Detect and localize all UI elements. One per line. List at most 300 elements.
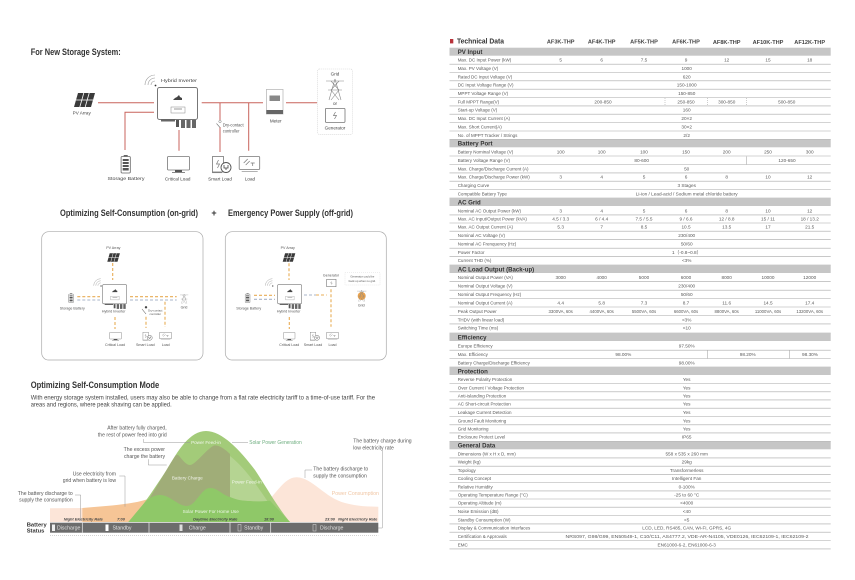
icon: critical load bbox=[110, 332, 121, 340]
section: AC Load Output: 5000 bbox=[639, 275, 650, 280]
section: AC Load Output: THDV (with linear load) bbox=[458, 317, 505, 322]
section: Protection: Yes bbox=[683, 410, 691, 415]
note: charge during low rate: The battery charge during bbox=[353, 438, 412, 444]
section: AC Grid: 12 bbox=[807, 208, 813, 213]
status: discharge: Discharge bbox=[57, 526, 80, 532]
section: Battery Port: 3 bbox=[559, 175, 562, 180]
label: battery status: Status bbox=[27, 529, 44, 535]
section: AC Grid: 13.5 bbox=[722, 225, 732, 230]
section: AC Grid: AC Grid bbox=[458, 199, 481, 206]
section: Battery Port: Max. Charge/Discharge Current (A) bbox=[458, 166, 529, 171]
section: Efficiency: 98.00% bbox=[615, 352, 631, 357]
section: AC Load Output: 8800VA, 60s bbox=[715, 309, 739, 314]
section: General Data: 558 x 535 x 260 mm bbox=[665, 451, 708, 456]
section: AC Grid: Nominal AC Frenquency (Hz) bbox=[458, 242, 517, 247]
chart: daily energy profile bbox=[18, 425, 412, 536]
time labels: 23:00 bbox=[324, 516, 336, 521]
section: AC Grid: Max. AC Input/Output Power (kVA) bbox=[458, 217, 527, 222]
section: AC Load Output: 3300VA, 60s bbox=[549, 309, 573, 314]
section: Battery Port: 3 Stages bbox=[677, 183, 697, 188]
section: Battery Port: 100 bbox=[557, 149, 565, 154]
label: or: or bbox=[333, 101, 338, 106]
section: General Data: General Data bbox=[458, 443, 496, 450]
time labels: 7:00 bbox=[117, 516, 126, 521]
icon: storage battery bbox=[121, 155, 130, 173]
section: AC Grid: 1（-0.8~0.8） bbox=[672, 250, 701, 255]
section: Battery Port: 100 bbox=[640, 149, 648, 154]
section: PV Input: 6 bbox=[600, 58, 603, 63]
section: General Data: Operating Temperature Range (°C) bbox=[458, 493, 528, 498]
section: AC Load Output: Peak Output Power bbox=[458, 309, 497, 314]
label: PV Array: PV Array bbox=[73, 110, 91, 116]
section: Efficiency: Efficiency bbox=[458, 334, 487, 341]
label: PV Array: PV Array bbox=[106, 246, 121, 250]
section: AC Load Output: 230/400 bbox=[678, 284, 696, 289]
flow: PV bbox=[288, 263, 290, 280]
area: grid consumption bbox=[82, 499, 152, 522]
model headers: AF4K-THP bbox=[588, 40, 616, 46]
section: PV Input: 620 bbox=[683, 74, 691, 79]
section: General Data: <40 bbox=[683, 509, 691, 514]
section: Protection: Protection bbox=[458, 368, 488, 375]
label: Load: Load bbox=[245, 177, 256, 182]
section: General Data bbox=[450, 441, 831, 549]
plus sign: + bbox=[211, 208, 217, 218]
section: Protection: Yes bbox=[683, 402, 691, 407]
area: power consumption bbox=[50, 477, 378, 522]
icon: load bbox=[326, 332, 339, 340]
paragraph: With energy storage system installed, users may also be able to change from a flat rate electricity tariff to a time-of-use tariff. For the bbox=[31, 395, 375, 402]
icon: critical load bbox=[284, 332, 295, 340]
section: PV Input: 150-1000 bbox=[677, 83, 697, 88]
heading: off-grid: Emergency Power Supply (off-grid) bbox=[228, 208, 353, 218]
section: General Data: Standby Consumption (W) bbox=[458, 517, 511, 522]
section: AC Load Output: Switching Time (ms) bbox=[458, 326, 499, 331]
section: Efficiency: 98.00% bbox=[679, 360, 695, 365]
section: Battery Port: Max. Charge/Discharge Power (kW) bbox=[458, 175, 530, 180]
section: PV Input: Max. Short Current(A) bbox=[458, 124, 502, 129]
label: Storage Battery: Storage Battery bbox=[108, 176, 145, 181]
section: PV Input: 7.5 bbox=[641, 58, 648, 63]
section: AC Grid: 17 bbox=[765, 225, 771, 230]
section: PV Input bbox=[450, 48, 831, 139]
section: General Data: <4000 bbox=[680, 501, 694, 506]
section: Protection: Anti-islanding Protection bbox=[458, 393, 507, 398]
time labels: Daytime Electricity Rate bbox=[193, 516, 238, 521]
label: Critical Load: Critical Load bbox=[165, 177, 191, 182]
section: Battery Port: 120-650 bbox=[778, 158, 796, 163]
section: AC Load Output: 6000 bbox=[681, 275, 692, 280]
section: AC Grid: 7.5 / 5.5 bbox=[636, 217, 653, 222]
section: AC Load Output: 17.4 bbox=[805, 300, 815, 305]
flow: PV bbox=[112, 263, 114, 280]
section: AC Grid: Nominal AC Output Power (kW) bbox=[458, 208, 521, 213]
icon: PV array bbox=[74, 93, 95, 107]
status: discharge bbox=[52, 524, 80, 532]
section: Battery Port: 6 bbox=[685, 175, 688, 180]
icon: load bbox=[239, 156, 260, 172]
icon: meter bbox=[266, 89, 283, 114]
label: power feed-in top: Power Feed-in bbox=[191, 440, 221, 445]
section: AC Load Output: Nominal Output Current (A) bbox=[458, 300, 513, 305]
section: Protection: Yes bbox=[683, 418, 691, 423]
label: PV Array: PV Array bbox=[281, 246, 295, 250]
section: PV Input: 12 bbox=[724, 58, 730, 63]
icon: generator bbox=[325, 108, 345, 122]
note: grid when battery low: Use electricity from bbox=[73, 471, 116, 477]
section: General Data: Cooling Concept bbox=[458, 476, 492, 481]
section: AC Load Output: <3% bbox=[682, 317, 691, 322]
section: PV Input: Start-up Voltage (V) bbox=[458, 108, 498, 113]
area: solar for home use bbox=[128, 488, 290, 522]
label: solar power generation: Solar Power Generation bbox=[249, 440, 302, 446]
section: Efficiency: Battery Charge/Discharge Efficiency bbox=[458, 360, 531, 365]
icon: battery bbox=[245, 293, 250, 303]
section: AC Load Output: 11000VA, 60s bbox=[755, 309, 781, 314]
status: standby bbox=[106, 524, 132, 532]
note: grid when battery low: grid when battery is low bbox=[63, 478, 116, 484]
section: AC Grid: 7 bbox=[600, 225, 603, 230]
icon: grid bbox=[180, 294, 188, 304]
icon: smart load bbox=[310, 332, 320, 340]
model headers: AF3K-THP bbox=[547, 40, 575, 46]
area: solar power generation bbox=[128, 431, 290, 522]
section: Battery Port: Battery Voltage Range (V) bbox=[458, 158, 510, 163]
icon: wifi bbox=[94, 279, 102, 287]
icon: hybrid inverter bbox=[158, 88, 198, 128]
section: AC Load Output: <10 bbox=[683, 326, 691, 331]
panel: off-grid diagram bbox=[225, 232, 386, 360]
label: Meter: Meter bbox=[270, 118, 282, 123]
label: Grid: Grid bbox=[181, 306, 187, 310]
model headers: AF12K-THP bbox=[794, 40, 825, 46]
section: AC Load Output: 13200VA, 60s bbox=[796, 309, 823, 314]
section: General Data: Display & Communication Interfaces bbox=[458, 526, 531, 531]
section: Protection: Yes bbox=[683, 393, 691, 398]
section: AC Load Output: Nominal Output Frequency (Hz) bbox=[458, 292, 522, 297]
time labels: Night Electricity Rate bbox=[338, 516, 378, 521]
system diagram bbox=[73, 69, 352, 182]
section: AC Load Output: 12000 bbox=[803, 275, 817, 280]
section: Efficiency: 97.50% bbox=[679, 344, 695, 349]
section: AC Grid: Current THD (%) bbox=[458, 258, 492, 263]
section: AC Load Output: Nominal Output Power (VA) bbox=[458, 275, 513, 280]
icon: inverter bbox=[103, 285, 127, 309]
note: excess power: The excess power bbox=[124, 447, 165, 453]
section: Battery Port: 50 bbox=[684, 166, 690, 171]
note: discharge right: The battery discharge to bbox=[313, 467, 368, 473]
section: PV Input: 250-850 bbox=[677, 99, 695, 104]
section: PV Input: MPPT Voltage Range (V) bbox=[458, 91, 509, 96]
icon: pylon bbox=[326, 79, 344, 100]
section: AC Load Output: 4400VA, 60s bbox=[590, 309, 614, 314]
section: PV Input: 200-850 bbox=[594, 99, 612, 104]
note: excess power: charge the battery bbox=[124, 454, 165, 460]
section: AC Load Output: 3000 bbox=[555, 275, 566, 280]
panel: grid or generator bbox=[318, 69, 352, 134]
icon: load bbox=[159, 332, 172, 340]
section: AC Load Output: 11.6 bbox=[722, 300, 731, 305]
section: General Data: Topology bbox=[458, 468, 476, 473]
section: AC Grid: 12 / 8.8 bbox=[719, 217, 735, 222]
status: discharge bbox=[313, 524, 343, 532]
dry-contact switch bbox=[142, 306, 147, 314]
section: AC Load Output: 8.7 bbox=[683, 300, 690, 305]
section: Protection: AC Short-circuit Protection bbox=[458, 402, 511, 407]
section: Battery Port: 12 bbox=[807, 175, 813, 180]
section: AC Load Output: 8000 bbox=[721, 275, 732, 280]
section: AC Grid: Max. AC Output Current (A) bbox=[458, 225, 513, 230]
section: AC Grid: 15 / 11 bbox=[761, 217, 775, 222]
section: General Data: Intelligent Fan bbox=[672, 476, 702, 481]
time labels: Night Electricity Rate bbox=[64, 516, 104, 521]
label: Critical Load: Critical Load bbox=[105, 343, 125, 347]
status: standby: Standby bbox=[244, 526, 264, 532]
label: Grid: Grid bbox=[331, 72, 340, 77]
section: AC Load Output: 6600VA, 60s bbox=[674, 309, 698, 314]
section: AC Load Output: 5500VA, 60s bbox=[632, 309, 656, 314]
icon: solar bbox=[107, 253, 120, 262]
section: AC Load Output: 4.4 bbox=[557, 300, 564, 305]
paragraph: areas and regions, where peak shaving can be applied. bbox=[31, 402, 172, 409]
flow: battery and grid bbox=[77, 297, 177, 300]
section: General Data: 29kg bbox=[682, 460, 692, 465]
section: Battery Port: Battery Port bbox=[458, 141, 493, 148]
section: Battery Port: 150 bbox=[682, 149, 690, 154]
note: discharge right: supply the consumption bbox=[313, 474, 367, 480]
wiring bbox=[98, 103, 317, 152]
section: General Data: NRS097, G98/G99, EN50549-1, C10/C11, AS4777.2, VDE-AR-N4105, VDE0126, IEC62109-1, IEC62109-2 bbox=[566, 534, 809, 539]
section: General Data: 0-100% bbox=[679, 484, 695, 489]
label: battery status: Battery bbox=[27, 522, 47, 528]
section: AC Grid: 8 bbox=[725, 208, 728, 213]
label: battery charge: Battery Charge bbox=[172, 476, 203, 481]
section: Protection: Ground Fault Monitoring bbox=[458, 418, 507, 423]
section: PV Input: No. of MPPT Tracker / Strings bbox=[458, 133, 518, 138]
icon: inverter bbox=[278, 285, 302, 309]
section: PV Input: 18 bbox=[807, 58, 813, 63]
section: PV Input: 20×2 bbox=[681, 116, 692, 121]
section: PV Input: 1000 bbox=[681, 66, 692, 71]
callout: generator note bbox=[345, 273, 380, 285]
section: AC Grid: 5 bbox=[643, 208, 646, 213]
section: Battery Port: 100 bbox=[598, 149, 606, 154]
section: AC Grid: 21.5 bbox=[805, 225, 815, 230]
section: Protection: Over Current / Voltage Protection bbox=[458, 385, 524, 390]
time labels: 18:00 bbox=[264, 516, 275, 521]
section: AC Load Output: 7.3 bbox=[641, 300, 648, 305]
section: PV Input: 300-850 bbox=[718, 99, 736, 104]
icon: battery bbox=[69, 293, 73, 303]
section: General Data: EMC bbox=[458, 542, 468, 547]
dry-contact switch bbox=[216, 120, 221, 128]
heading: on-grid: Optimizing Self-Consumption (on-grid) bbox=[60, 208, 198, 218]
label: Smart Load: Smart Load bbox=[136, 343, 155, 347]
area: battery charge bbox=[149, 445, 230, 508]
section: AC Grid: 8.5 bbox=[641, 225, 648, 230]
label: Critical Load: Critical Load bbox=[279, 343, 299, 347]
section: AC Load Output: 4000 bbox=[596, 275, 607, 280]
model headers: AF6K-THP bbox=[672, 40, 700, 46]
label: Load: Load bbox=[328, 343, 336, 347]
section: General Data: Weight (kg) bbox=[458, 460, 481, 465]
section: Battery Port: Compatible Battery Type bbox=[458, 191, 507, 196]
section: Battery Port: Battery Nominal Voltage (V) bbox=[458, 149, 514, 154]
section: PV Input: Full MPPT Range(V) bbox=[458, 99, 500, 104]
section: PV Input: Max. DC Input Power (kW) bbox=[458, 58, 512, 63]
section: Battery Port: 8 bbox=[725, 175, 728, 180]
section: Battery Port: Charging Curve bbox=[458, 183, 490, 188]
section: Battery Port: 200 bbox=[723, 149, 731, 154]
section: Battery Port bbox=[450, 139, 831, 198]
section: General Data: EN61000-6-2, EN61000-6-3 bbox=[658, 542, 716, 547]
label: Load: Load bbox=[162, 343, 170, 347]
section: AC Grid bbox=[450, 198, 831, 265]
section: General Data: Certification & Approvals bbox=[458, 534, 507, 539]
panel: on-grid diagram bbox=[42, 232, 203, 360]
status: standby bbox=[238, 524, 264, 532]
icon: wifi bbox=[265, 279, 273, 287]
icon: wifi bbox=[145, 75, 156, 86]
flow: generator and load bbox=[289, 289, 331, 329]
section: General Data: Operating Altitude (m) bbox=[458, 501, 502, 506]
label: Storage Battery: Storage Battery bbox=[236, 307, 261, 311]
label: controller: controller bbox=[150, 312, 161, 316]
section: PV Input: 2/2 bbox=[683, 133, 690, 138]
section: AC Grid: 10 bbox=[765, 208, 771, 213]
section: PV Input: 5 bbox=[559, 58, 562, 63]
section: Protection: Enclosure Protect Level bbox=[458, 435, 505, 440]
label: solar for home: Solar Power For Home Use bbox=[183, 509, 239, 514]
heading: Technical Data: Technical Data bbox=[457, 37, 505, 46]
label: Smart Load: Smart Load bbox=[304, 343, 322, 347]
flow: loads bbox=[115, 302, 165, 329]
note: charge during low rate: low electricity rate bbox=[353, 445, 394, 451]
label: Smart Load: Smart Load bbox=[208, 177, 232, 182]
section: AC Grid: 4.5 / 3.3 bbox=[552, 217, 570, 222]
section: AC Grid: 10.5 bbox=[681, 225, 691, 230]
icon: generator bbox=[327, 279, 336, 287]
section: AC Grid: 9 / 6.6 bbox=[679, 217, 693, 222]
section: Protection: Yes bbox=[683, 385, 691, 390]
leader lines bbox=[75, 439, 382, 528]
section: AC Grid: <3% bbox=[682, 258, 691, 263]
flow: battery bbox=[254, 295, 275, 299]
section: Efficiency: Europe Efficiency bbox=[458, 344, 493, 349]
section: Protection: Leakage Current Detection bbox=[458, 410, 512, 415]
section: AC Grid: 4 bbox=[600, 208, 603, 213]
label: power feed-in right: Power Feed-in bbox=[232, 480, 262, 485]
callout: generator note: back up when no grid. bbox=[349, 279, 376, 283]
section: General Data: Dimensions (W x H x D, mm) bbox=[458, 451, 516, 456]
section: AC Grid: 6 / 4.4 bbox=[595, 217, 609, 222]
section: General Data: Noise Emission (dB) bbox=[458, 509, 499, 514]
section: Battery Port: 5 bbox=[643, 175, 646, 180]
label: power consumption: Power Consumption bbox=[332, 491, 379, 497]
section: Protection: Grid Monitoring bbox=[458, 426, 489, 431]
section: PV Input: PV Input bbox=[458, 49, 482, 56]
section: Battery Port: 10 bbox=[765, 175, 771, 180]
section: PV Input: DC Input Voltage Range (V) bbox=[458, 83, 514, 88]
label: Storage Battery: Storage Battery bbox=[60, 307, 85, 311]
panel: technical data table bbox=[450, 37, 831, 549]
section: Protection: Yes bbox=[683, 426, 691, 431]
section: PV Input: Max. PV Voltage (V) bbox=[458, 66, 499, 71]
label: Hybrid Inverter: Hybrid Inverter bbox=[161, 78, 198, 83]
note: discharge left: The battery discharge to bbox=[18, 491, 73, 497]
icon: solar bbox=[283, 253, 295, 262]
section: General Data: LCD, LED, RS485, CAN, Wi-Fi, GPRS, 4G bbox=[642, 526, 731, 531]
section: AC Grid: Nominal AC Voltage (V) bbox=[458, 233, 505, 238]
section: AC Load Output: 50/60 bbox=[681, 292, 693, 297]
status: standby: Standby bbox=[112, 526, 132, 532]
section: Protection: IP65 bbox=[682, 435, 692, 440]
section: AC Grid: 6 bbox=[685, 208, 688, 213]
section: Battery Port: 250 bbox=[764, 149, 772, 154]
label: dry-contact controller: controller bbox=[223, 128, 240, 134]
section: PV Input: 9 bbox=[685, 58, 688, 63]
section: General Data: Transformerless bbox=[670, 468, 704, 473]
section: Battery Port: Li-ion / Lead-acid / Sodium metal chloride battery bbox=[636, 191, 738, 196]
section: AC Load Output bbox=[450, 265, 831, 333]
time labels bbox=[64, 516, 378, 521]
section: AC Grid: 18 / 13.2 bbox=[801, 217, 819, 222]
label: Generator: Generator bbox=[323, 274, 340, 278]
section: Efficiency: 98.20% bbox=[740, 352, 756, 357]
label: Hybrid Inverter: Hybrid Inverter bbox=[277, 309, 301, 313]
section: PV Input: 160 bbox=[683, 108, 691, 113]
section: AC Grid: 230/400 bbox=[678, 233, 696, 238]
status: charge bbox=[180, 524, 206, 532]
note: discharge left: supply the consumption bbox=[19, 498, 73, 504]
section: Battery Port: 80-600 bbox=[634, 158, 649, 163]
status: discharge: Discharge bbox=[320, 526, 343, 532]
section: General Data: Relative Humidity bbox=[458, 484, 493, 489]
section: AC Grid: 50/60 bbox=[681, 242, 693, 247]
label: Hybrid Inverter: Hybrid Inverter bbox=[102, 309, 126, 313]
label: controller: Dry-contact bbox=[148, 308, 163, 312]
heading: For New Storage System: For New Storage System: bbox=[31, 47, 121, 57]
section: General Data: <5 bbox=[684, 517, 690, 522]
note: fully charged: After battery fully charged, bbox=[107, 425, 167, 431]
section: AC Load Output: 5.8 bbox=[598, 300, 605, 305]
icon: smart load bbox=[143, 332, 152, 340]
section: Battery Port: 4 bbox=[600, 175, 603, 180]
note: fully charged: the rest of power feed into grid bbox=[98, 432, 167, 438]
section: Efficiency: Max. Efficiency bbox=[458, 352, 489, 357]
section: AC Load Output: 10000 bbox=[761, 275, 775, 280]
label: dry-contact controller: Dry-contact bbox=[223, 122, 244, 128]
section: AC Load Output: Nominal Output Voltage (V) bbox=[458, 284, 513, 289]
section: Protection: Yes bbox=[683, 377, 691, 382]
section: AC Load Output: AC Load Output (Back-up) bbox=[458, 266, 534, 273]
section: General Data: -25 to 60 °C bbox=[674, 493, 700, 498]
icon: smart load bbox=[212, 156, 231, 173]
area: lighter feed-in bbox=[230, 456, 268, 502]
section: Efficiency: 98.30% bbox=[802, 352, 818, 357]
section: Protection bbox=[450, 367, 831, 441]
label: Grid: Grid bbox=[358, 304, 365, 308]
label: Generator: Generator bbox=[325, 126, 346, 131]
model headers: AF8K-THP bbox=[713, 40, 741, 46]
section: PV Input: 150-850 bbox=[678, 91, 696, 96]
icon: red marker bbox=[450, 39, 453, 43]
section: PV Input: 500-850 bbox=[778, 99, 796, 104]
icon: critical load bbox=[168, 156, 190, 172]
section: Battery Port: 300 bbox=[806, 149, 814, 154]
section: AC Grid: 5.3 bbox=[557, 225, 564, 230]
callout: generator note: Generator could be bbox=[350, 274, 375, 278]
